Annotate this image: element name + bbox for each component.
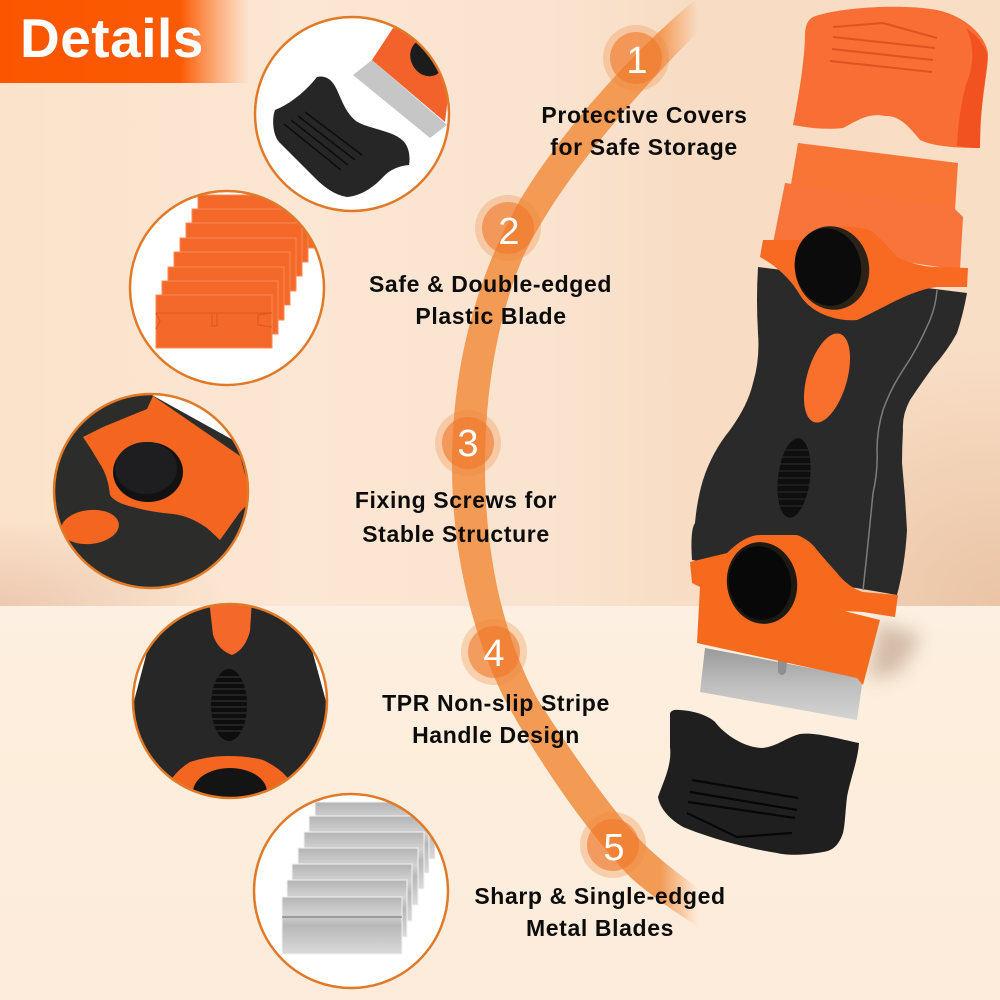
detail circle: plastic blades: [130, 191, 324, 385]
lower orange collar: [690, 535, 898, 633]
black bottom cover: [658, 710, 859, 855]
scraper tool: [690, 143, 968, 720]
step 4: 4: [483, 633, 505, 675]
upper orange collar: [760, 227, 968, 320]
detail circle: screw: [54, 394, 252, 588]
step 5: [474, 812, 726, 941]
step 5: 5: [603, 827, 625, 869]
step 3: Stable Structure: [362, 521, 550, 547]
step 2: Safe & Double-edged: [369, 271, 612, 297]
step 2: Plastic Blade: [415, 303, 567, 329]
grip stripes: [778, 438, 810, 518]
detail circle: grip: [132, 602, 328, 800]
step 5: Metal Blades: [526, 915, 674, 941]
title banner: [0, 0, 250, 83]
bottom screw: [720, 537, 804, 629]
top screw: [787, 219, 877, 317]
upper blade holder: [773, 183, 963, 270]
step 1: 1: [626, 40, 648, 82]
step 1: Protective Covers: [541, 102, 748, 128]
detail circle: metal blades: [254, 794, 448, 988]
lower metal blade: [700, 648, 863, 720]
step 1: for Safe Storage: [550, 134, 738, 160]
orange top cover: [793, 7, 988, 148]
title banner: Details: [20, 7, 204, 69]
step 3: Fixing Screws for: [355, 487, 557, 513]
step 2: [369, 195, 612, 329]
orange oval inlay: [795, 328, 859, 428]
step 4: TPR Non-slip Stripe: [382, 690, 610, 716]
step 5: Sharp & Single-edged: [474, 883, 726, 909]
step 4: Handle Design: [412, 722, 580, 748]
step 4: [382, 619, 610, 748]
step 1: [541, 25, 748, 160]
curved orange arc: [452, 0, 705, 928]
step 3: 3: [457, 423, 479, 465]
lower blade holder: [697, 587, 880, 685]
detail circle: black cover: [255, 17, 455, 211]
upper plastic blade: [790, 143, 958, 210]
step 2: 2: [498, 211, 520, 253]
step 3: [355, 410, 557, 547]
handle: [691, 267, 967, 595]
